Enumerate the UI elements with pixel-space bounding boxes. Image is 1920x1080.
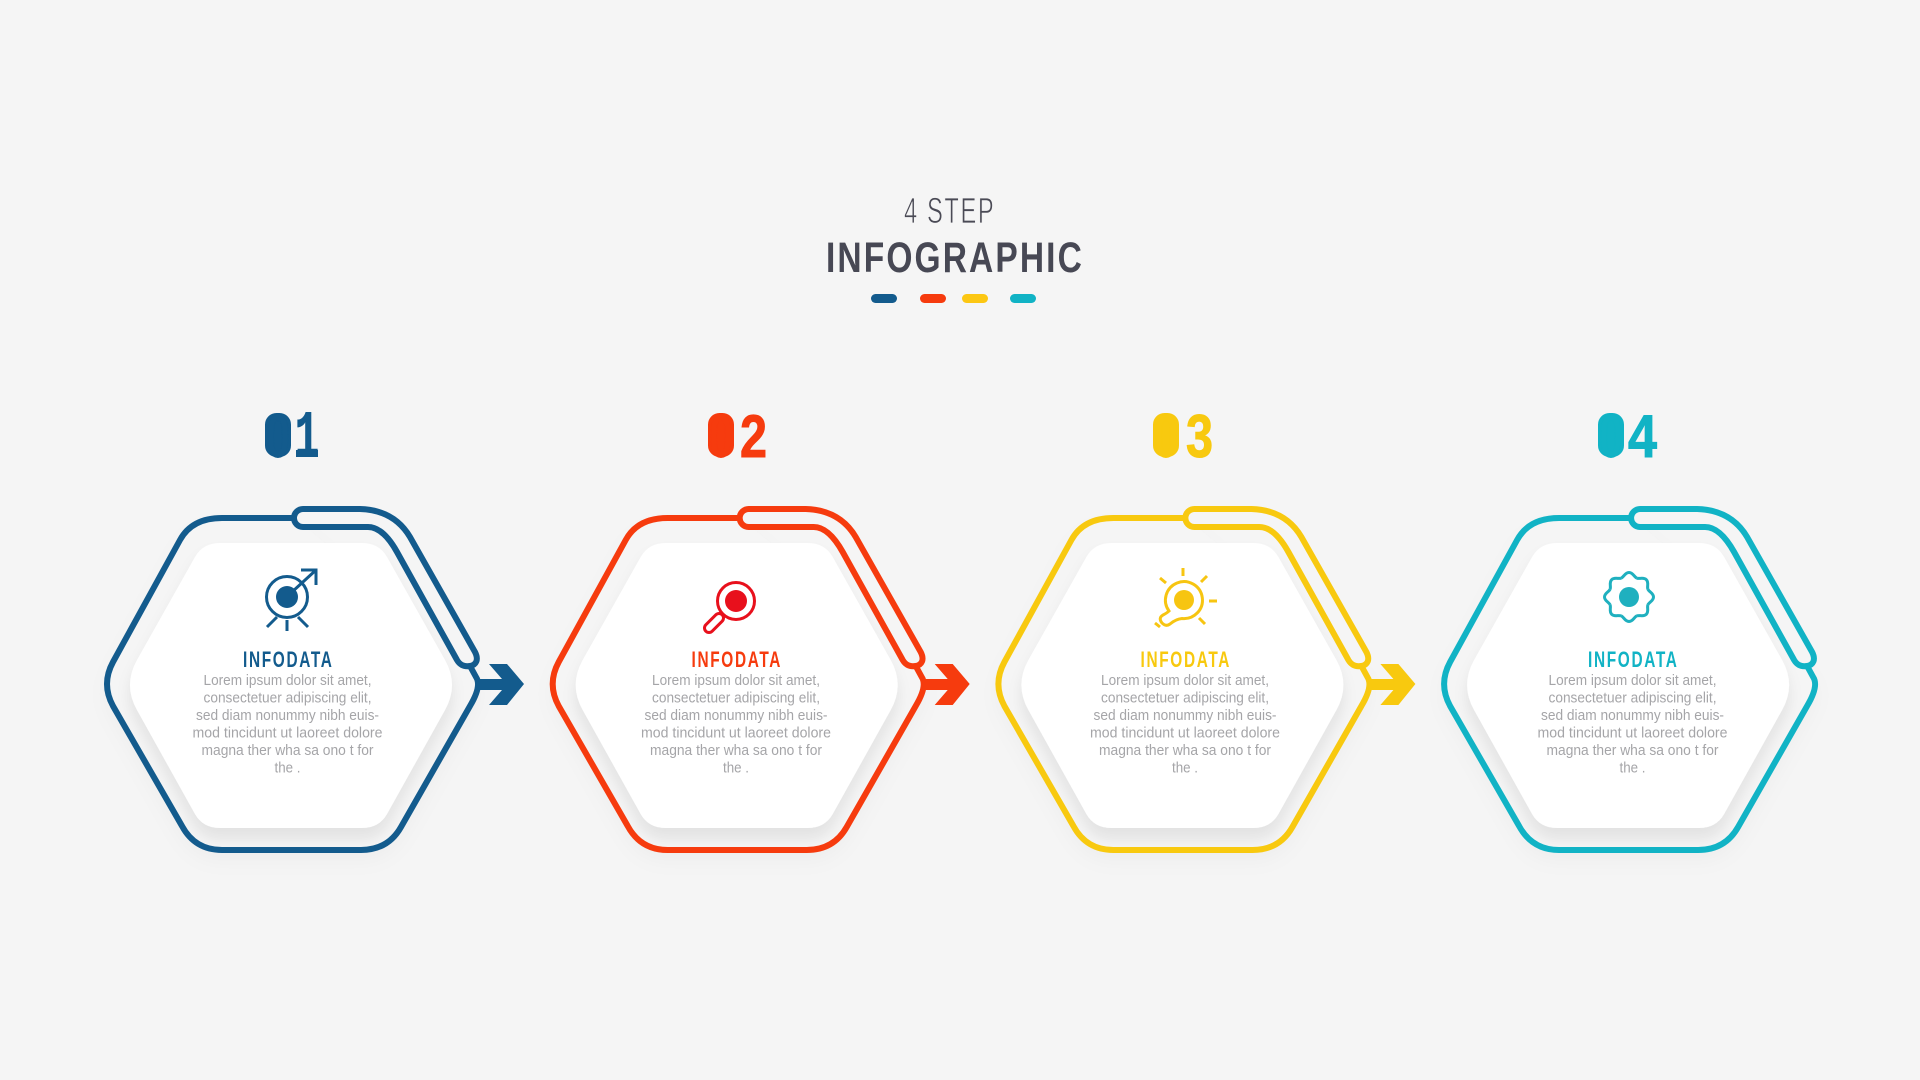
heading: INFODATA bbox=[243, 648, 332, 673]
icon: light bulb bbox=[1155, 568, 1217, 627]
step number 03: 3 bbox=[1186, 403, 1213, 470]
hexagon frame bbox=[553, 509, 924, 850]
heading: INFODATA bbox=[1140, 648, 1230, 673]
step number 01: 1 bbox=[295, 401, 319, 476]
body text: consectetuer adipiscing elit, bbox=[204, 690, 372, 706]
step number 02 bbox=[708, 403, 767, 470]
step number 04: 0 bbox=[1599, 403, 1623, 470]
body text: magna ther wha sa ono t for bbox=[1099, 743, 1271, 759]
body text: mod tincidunt ut laoreet dolore bbox=[1090, 726, 1280, 742]
hexagon frame bbox=[1444, 509, 1815, 850]
body text: magna ther wha sa ono t for bbox=[650, 743, 822, 759]
body text: magna ther wha sa ono t for bbox=[1546, 743, 1719, 759]
body text: Lorem ipsum dolor sit amet, bbox=[1548, 673, 1716, 689]
body text bbox=[1090, 673, 1280, 776]
body text: consectetuer adipiscing elit, bbox=[652, 690, 820, 706]
panel: step 1 bbox=[107, 401, 524, 850]
body text: Lorem ipsum dolor sit amet, bbox=[204, 673, 372, 689]
title line: 4 STEP: 4 STEP bbox=[904, 191, 994, 231]
hexagon frame bbox=[107, 509, 478, 850]
body text: consectetuer adipiscing elit, bbox=[1548, 690, 1716, 706]
body text: mod tincidunt ut laoreet dolore bbox=[1538, 726, 1728, 742]
body text: magna ther wha sa ono t for bbox=[202, 743, 374, 759]
icon: gear bbox=[1604, 572, 1654, 622]
body text: sed diam nonummy nibh euis- bbox=[196, 708, 379, 724]
heading: INFODATA bbox=[1588, 648, 1677, 673]
body text: Lorem ipsum dolor sit amet, bbox=[652, 673, 820, 689]
arrow bbox=[1368, 664, 1415, 705]
colour key pills bbox=[871, 294, 1036, 303]
panel: step 4 bbox=[1444, 403, 1815, 850]
body text bbox=[641, 673, 831, 776]
step number 01 bbox=[266, 401, 319, 476]
arrow bbox=[923, 664, 970, 705]
body text: mod tincidunt ut laoreet dolore bbox=[192, 726, 382, 742]
step number 01: 0 bbox=[266, 403, 290, 470]
step number 03: 0 bbox=[1154, 403, 1178, 470]
panel: step 2 bbox=[553, 403, 970, 850]
heading: INFODATA bbox=[692, 648, 781, 673]
hexagon frame bbox=[998, 509, 1369, 850]
body text: the . bbox=[723, 760, 749, 776]
body text: sed diam nonummy nibh euis- bbox=[644, 708, 828, 724]
body text: sed diam nonummy nibh euis- bbox=[1541, 708, 1724, 724]
body text: the . bbox=[1620, 760, 1646, 776]
step number 03 bbox=[1154, 403, 1213, 470]
body text bbox=[1538, 673, 1728, 776]
step number 04 bbox=[1598, 403, 1658, 470]
body text: Lorem ipsum dolor sit amet, bbox=[1101, 673, 1269, 689]
body text bbox=[192, 673, 382, 776]
title line: INFOGRAPHIC: INFOGRAPHIC bbox=[826, 234, 1082, 282]
step number 02: 2 bbox=[740, 403, 767, 470]
step number 04: 4 bbox=[1628, 403, 1658, 470]
body text: the . bbox=[1172, 760, 1198, 776]
icon: magnifier bbox=[709, 582, 754, 628]
icon: target with arrow bbox=[266, 570, 316, 631]
body text: consectetuer adipiscing elit, bbox=[1101, 690, 1269, 706]
panel: step 3 bbox=[998, 403, 1415, 850]
arrow bbox=[477, 664, 524, 705]
step number 02: 0 bbox=[709, 403, 733, 470]
title bbox=[826, 191, 1082, 282]
body text: the . bbox=[274, 760, 300, 776]
body text: mod tincidunt ut laoreet dolore bbox=[641, 726, 831, 742]
body text: sed diam nonummy nibh euis- bbox=[1094, 708, 1277, 724]
